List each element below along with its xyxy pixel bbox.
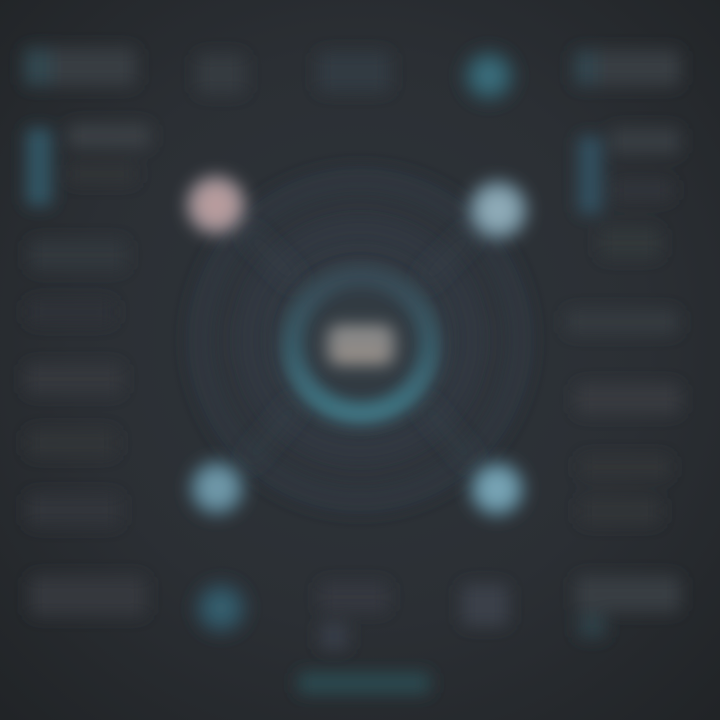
diagram: orbit rings <box>200 180 520 500</box>
label: central pill <box>326 324 396 366</box>
chart: central teal ring <box>292 276 430 414</box>
icon: pink node top left <box>186 175 246 235</box>
icon: top teal node <box>463 50 515 102</box>
icon: blue node bottom left <box>189 460 245 516</box>
panel: central halo <box>200 180 520 500</box>
diagram: connectors to nodes <box>245 230 475 465</box>
caption: bottom teal label <box>298 672 430 694</box>
panel: left column blocks <box>26 124 150 526</box>
icon: bottom teal node <box>195 582 247 634</box>
panel: right column blocks <box>566 128 680 524</box>
panel: top row blocks <box>24 48 680 94</box>
panel: bottom row blocks <box>30 576 680 650</box>
icon: light blue node top right <box>468 180 528 240</box>
icon: blue node bottom right <box>469 461 525 517</box>
